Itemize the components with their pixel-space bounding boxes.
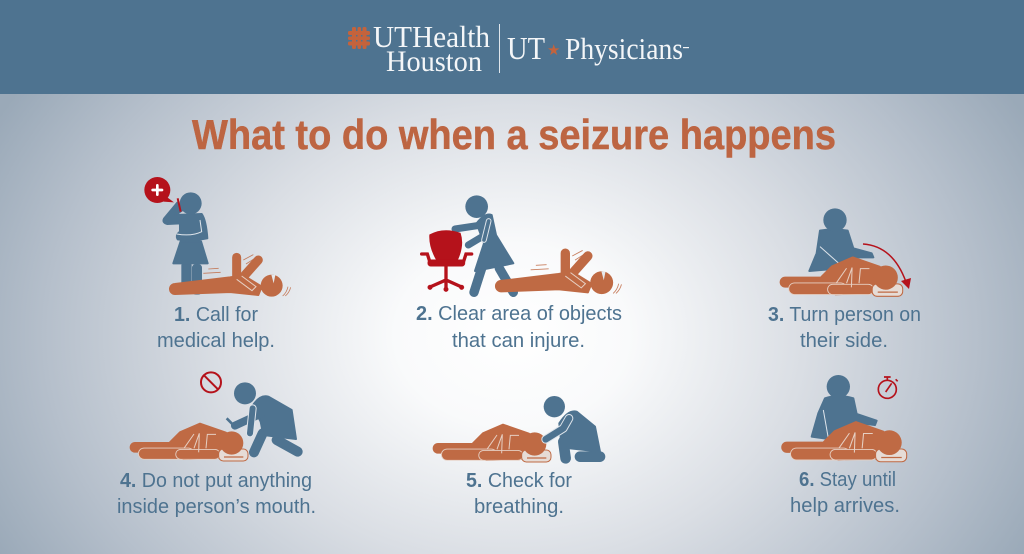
step 4 label: 4. Do not put anything: [120, 470, 312, 492]
step 3 label: their side.: [800, 330, 888, 352]
logo text: UTHealth: UTHealth: [373, 19, 490, 54]
step 5 label: 5. Check for: [466, 470, 572, 492]
title: What to do when a seizure happens: [192, 111, 836, 158]
step 2 label: [416, 303, 622, 352]
logo text: Houston: Houston: [386, 45, 482, 78]
panel: step 3: [768, 208, 921, 352]
illustration: woman turning person: [809, 208, 873, 271]
step 4 label: inside person’s mouth.: [117, 496, 316, 518]
step 3 label: [768, 304, 921, 352]
icon: UTHealth emblem: [348, 27, 370, 49]
illustration: woman waiting with person: [812, 375, 898, 439]
step 3 label: 3. Turn person on: [768, 304, 921, 326]
logo text: UT: UT: [507, 30, 545, 66]
panel: step 2: [416, 195, 622, 352]
step 6 label: 6. Stay until: [799, 469, 896, 491]
illustration: woman moving chair: [422, 195, 513, 292]
logo lockup: [348, 19, 689, 78]
step 5 label: [466, 470, 572, 518]
logo text: Physicians: Physicians: [565, 31, 683, 66]
step 5 label: breathing.: [474, 496, 564, 518]
icon: red office chair: [422, 231, 472, 292]
panel: step 4: [117, 372, 316, 518]
panel: step 1: [144, 177, 291, 352]
step 2 label: that can injure.: [452, 330, 585, 352]
illustration: person lying, woman checking breathing: [438, 396, 600, 462]
arrow: turning direction: [863, 244, 911, 289]
panel: step 6: [787, 375, 907, 517]
header band: [0, 0, 1024, 94]
step 1 label: [157, 304, 275, 352]
illustration: person on floor: [496, 250, 621, 294]
icon: star: ★: [547, 41, 560, 59]
icon: medical help bubble: [144, 177, 174, 203]
icon: prohibited sign: [201, 372, 221, 392]
step 1 label: 1. Call for: [174, 304, 258, 326]
panel: step 5: [438, 396, 600, 518]
step 6 label: help arrives.: [790, 495, 900, 517]
illustration: woman calling, person on floor: [144, 177, 291, 297]
step 4 label: [117, 470, 316, 518]
step 1 label: medical help.: [157, 330, 275, 352]
icon: stopwatch: [878, 377, 898, 398]
step 2 label: 2. Clear area of objects: [416, 303, 622, 325]
illustration: person lying, woman leaning: [135, 372, 298, 461]
step 6 label: [790, 469, 900, 517]
